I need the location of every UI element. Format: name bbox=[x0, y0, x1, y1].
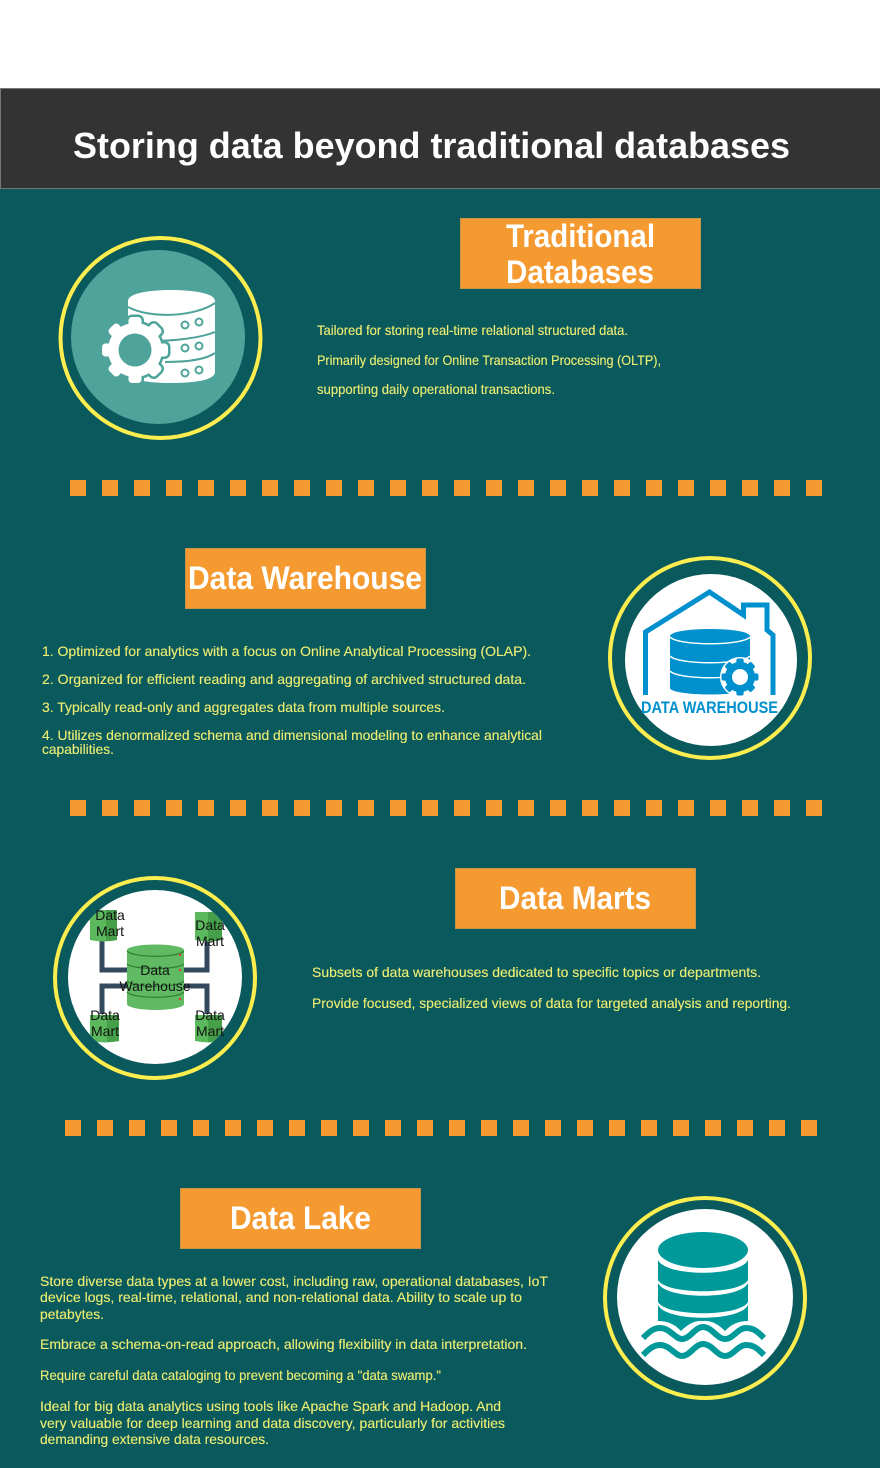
icon: database with gear bbox=[60, 238, 260, 438]
text block: Tailored for storing real-time relational structured data. bbox=[317, 322, 628, 338]
text block: Require careful data cataloging to prevent becoming a "data swamp." bbox=[40, 1367, 441, 1383]
text block bbox=[40, 1273, 548, 1447]
icon: data marts diagram: Mart bbox=[91, 1023, 119, 1039]
icon: data warehouse: DATA WAREHOUSE bbox=[641, 698, 778, 717]
heading box bbox=[456, 868, 696, 928]
icon: data marts diagram: Data bbox=[90, 1007, 120, 1023]
heading box bbox=[460, 218, 700, 290]
icon: data marts diagram: Warehouse bbox=[119, 978, 191, 994]
heading box: Traditional bbox=[506, 218, 655, 254]
panel: traditional databases bbox=[60, 218, 700, 438]
numbered list bbox=[42, 643, 542, 757]
text block: Store diverse data types at a lower cost, including raw, operational databases, IoT bbox=[40, 1273, 548, 1289]
text block: supporting daily operational transactions. bbox=[317, 381, 555, 397]
icon: data marts diagram: Data bbox=[140, 962, 170, 978]
text block: Primarily designed for Online Transaction Processing (OLTP), bbox=[317, 352, 661, 368]
text block: Ideal for big data analytics using tools like Apache Spark and Hadoop. And bbox=[40, 1398, 501, 1414]
text block bbox=[317, 322, 661, 397]
text block bbox=[312, 964, 791, 1011]
icon: data marts diagram: Mart bbox=[196, 1023, 224, 1039]
mart cylinders bbox=[90, 910, 222, 1042]
text block: petabytes. bbox=[40, 1306, 104, 1322]
numbered list: 1. Optimized for analytics with a focus on Online Analytical Processing (OLAP). bbox=[42, 643, 531, 659]
icon: data marts diagram: Mart bbox=[196, 933, 224, 949]
heading box: Data Warehouse bbox=[188, 560, 422, 596]
icon: data lake bbox=[605, 1198, 805, 1398]
text block: Provide focused, specialized views of data for targeted analysis and reporting. bbox=[312, 995, 791, 1011]
icon: data marts diagram bbox=[55, 878, 255, 1078]
icon: data warehouse bbox=[610, 558, 810, 758]
text block: demanding extensive data resources. bbox=[40, 1431, 269, 1447]
warehouse cylinder bbox=[127, 950, 184, 1004]
text block: very valuable for deep learning and data discovery, particularly for activities bbox=[40, 1415, 505, 1431]
icon: data marts diagram: Mart bbox=[96, 923, 124, 939]
numbered list: capabilities. bbox=[42, 741, 114, 757]
icon: data marts diagram: Data bbox=[195, 917, 225, 933]
heading box bbox=[180, 1188, 420, 1248]
title: Storing data beyond traditional databases bbox=[73, 125, 790, 166]
diagram labels: Data bbox=[95, 907, 125, 923]
numbered list: 4. Utilizes denormalized schema and dimensional modeling to enhance analytical bbox=[42, 727, 542, 743]
heading box: Data Marts bbox=[499, 880, 651, 916]
numbered list: 2. Organized for efficient reading and aggregating of archived structured data. bbox=[42, 671, 526, 687]
icon: data marts diagram: Data bbox=[195, 1007, 225, 1023]
text block: device logs, real-time, relational, and non-relational data. Ability to scale up to bbox=[40, 1289, 522, 1305]
header band bbox=[0, 88, 880, 188]
connectors bbox=[102, 941, 207, 1014]
text block: Embrace a schema-on-read approach, allowing flexibility in data interpretation. bbox=[40, 1336, 527, 1352]
panel: data marts bbox=[55, 868, 791, 1078]
numbered list: 3. Typically read-only and aggregates data from multiple sources. bbox=[42, 699, 445, 715]
heading box bbox=[186, 548, 426, 608]
heading box: Data Lake bbox=[230, 1200, 371, 1236]
panel: data lake bbox=[40, 1188, 805, 1447]
text block: Subsets of data warehouses dedicated to specific topics or departments. bbox=[312, 964, 761, 980]
heading box: Databases bbox=[506, 254, 654, 290]
panel: data warehouse bbox=[42, 548, 810, 758]
